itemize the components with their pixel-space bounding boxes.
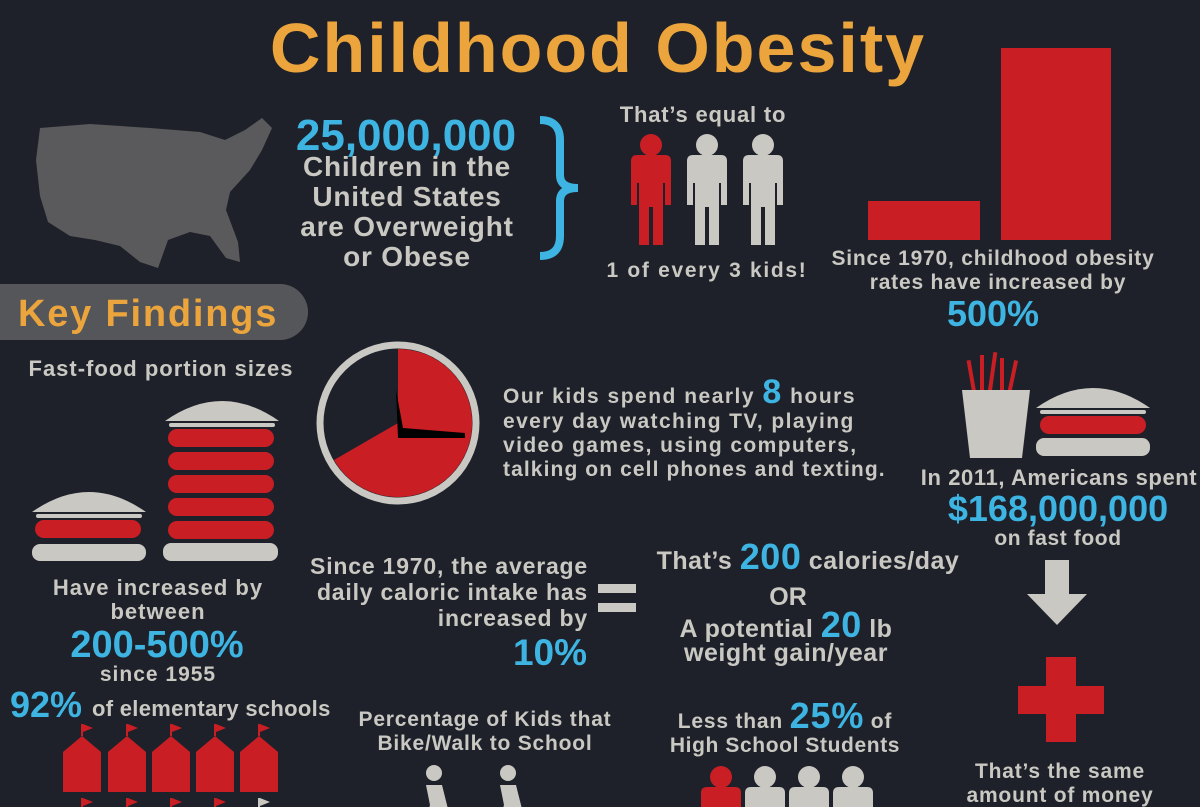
panel: portion sizes: between — [110, 599, 206, 624]
panel: portion sizes: Fast-food portion sizes — [28, 356, 294, 381]
text: caloric intake — [310, 553, 588, 673]
text: same amount of money — [966, 760, 1154, 807]
text: caloric intake: 10% — [513, 632, 587, 673]
brace — [540, 120, 578, 256]
title: Childhood Obesity — [270, 9, 926, 87]
text: calories/weight: A potential 20 lb — [680, 604, 892, 645]
panel: schools — [10, 684, 331, 807]
heading: Key Findings: Key Findings — [18, 293, 278, 335]
stat: 25,000,000 children: 25,000,000 — [296, 111, 516, 160]
panel: portion sizes: 200-500% — [70, 624, 244, 666]
text: same amount of money: That’s the same — [975, 760, 1145, 783]
bar chart: 500% increase — [831, 48, 1155, 334]
stat: fast food spending — [921, 465, 1197, 550]
icon: fries and burger — [962, 352, 1150, 458]
icon: red cross — [1018, 657, 1104, 742]
panel: high school students: Less than 25% of — [678, 695, 892, 736]
text: screen time: Our kids spend nearly 8 hours — [503, 373, 856, 411]
stat: 25,000,000 children: are Overweight — [300, 211, 514, 242]
bar chart: 500% increase: rates have increased by — [870, 271, 1126, 294]
panel: high school students: High School Students — [670, 734, 900, 757]
panel: portion sizes — [28, 356, 294, 686]
panel: schools: 92% — [10, 684, 82, 725]
panel: 1 of 3 kids — [606, 102, 808, 282]
text: calories/weight: That’s 200 calories/day — [657, 536, 959, 577]
panel: 1 of 3 kids: 1 of every 3 kids! — [606, 259, 808, 282]
bar chart: 500% increase: 500% — [947, 293, 1039, 334]
panel: high school students — [670, 695, 900, 807]
text: calories/weight: OR — [769, 583, 807, 611]
text: calories/weight — [657, 536, 959, 667]
panel: bike/walk: Percentage of Kids that — [359, 708, 611, 731]
panel: 1 of 3 kids: That’s equal to — [620, 102, 786, 127]
icon: US map — [36, 118, 272, 268]
heading: Key Findings — [0, 284, 308, 340]
text: calories/weight: weight gain/year — [683, 639, 888, 667]
text: caloric intake: daily caloric intake has — [317, 579, 588, 605]
text: screen time: talking on cell phones and texting. — [503, 458, 886, 481]
panel: schools: of elementary schools — [92, 696, 331, 721]
stat: fast food spending: on fast food — [994, 527, 1122, 550]
stat: 25,000,000 children: or Obese — [343, 241, 471, 272]
stat: fast food spending: $168,000,000 — [948, 488, 1168, 529]
stat: 25,000,000 children: United States — [312, 181, 502, 212]
text: screen time — [503, 373, 886, 481]
panel: portion sizes: since 1955 — [100, 663, 216, 686]
stat: 25,000,000 children: Children in the — [303, 151, 511, 182]
arrow — [1027, 560, 1087, 625]
panel: bike/walk — [359, 708, 611, 807]
icon: equals — [598, 584, 636, 612]
panel: portion sizes: Have increased by — [53, 575, 263, 600]
text: screen time: every day watching TV, playing — [503, 410, 855, 433]
panel: bike/walk: Bike/Walk to School — [377, 732, 593, 755]
stat: 25,000,000 children — [296, 111, 516, 272]
bar chart: 500% increase: Since 1970, childhood obesity — [831, 247, 1155, 270]
text: screen time: video games, using computers, — [503, 434, 858, 457]
text: caloric intake: Since 1970, the average — [310, 553, 588, 579]
text: same amount of money: amount of money — [966, 784, 1154, 807]
text: caloric intake: increased by — [438, 605, 588, 631]
icon: clock — [320, 345, 476, 501]
stat: fast food spending: In 2011, Americans spent — [921, 465, 1197, 490]
